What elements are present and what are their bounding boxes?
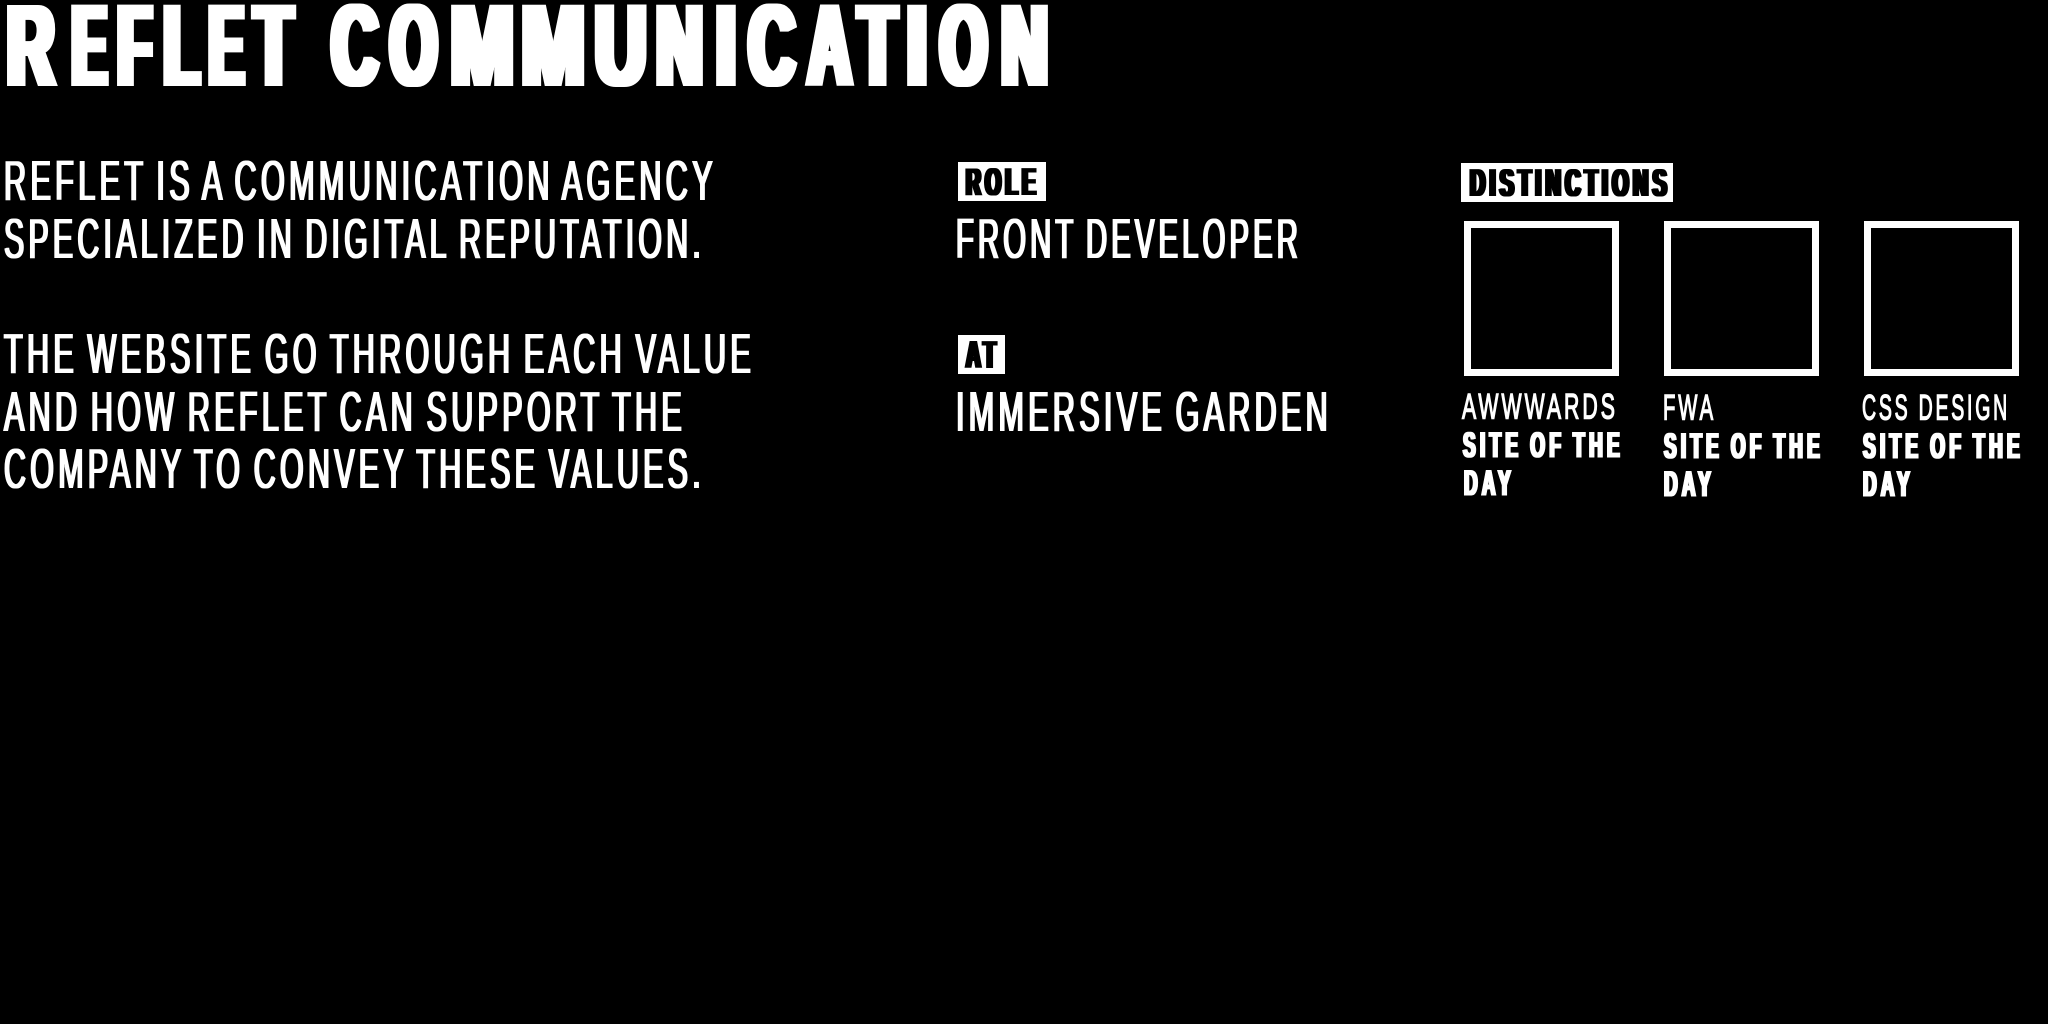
award: fwa [1663,224,1824,504]
panel: role [956,161,1302,270]
award: css design: DAY [1863,465,1914,504]
value: immersive garden: IMMERSIVE GARDEN [956,380,1332,443]
paragraph: website purpose: THE WEBSITE GO THROUGH EACH VALUE [4,322,755,385]
award: fwa: DAY [1664,465,1715,504]
paragraph: agency intro [4,149,717,270]
award: awwwards: AWWWARDS [1462,388,1618,426]
label: role [958,161,1046,204]
panel: distinctions [1461,162,2024,504]
award: awwwards: SITE OF THE [1463,426,1624,465]
award: awwwards: DAY [1464,464,1515,503]
panel: at [956,334,1332,443]
paragraph: agency intro: REFLET IS A COMMUNICATION AGENCY [4,149,717,212]
award: awwwards [1462,224,1624,503]
label: at: AT [966,334,1000,377]
label: role: ROLE [966,161,1040,204]
award: fwa: SITE OF THE [1664,427,1824,466]
award: css design [1862,224,2024,504]
award: fwa: FWA [1663,388,1716,428]
paragraph: website purpose: COMPANY TO CONVEY THESE VALUES. [4,437,705,500]
paragraph: website purpose [4,322,755,500]
paragraph: website purpose: AND HOW REFLET CAN SUPPORT THE [4,380,686,443]
paragraph: agency intro: SPECIALIZED IN DIGITAL REPUTATION. [4,207,705,270]
label: at [958,334,1005,377]
label: distinctions [1461,162,1673,205]
label: distinctions: DISTINCTIONS [1470,162,1671,205]
value: front developer: FRONT DEVELOPER [956,207,1302,270]
text block: description [4,149,755,500]
